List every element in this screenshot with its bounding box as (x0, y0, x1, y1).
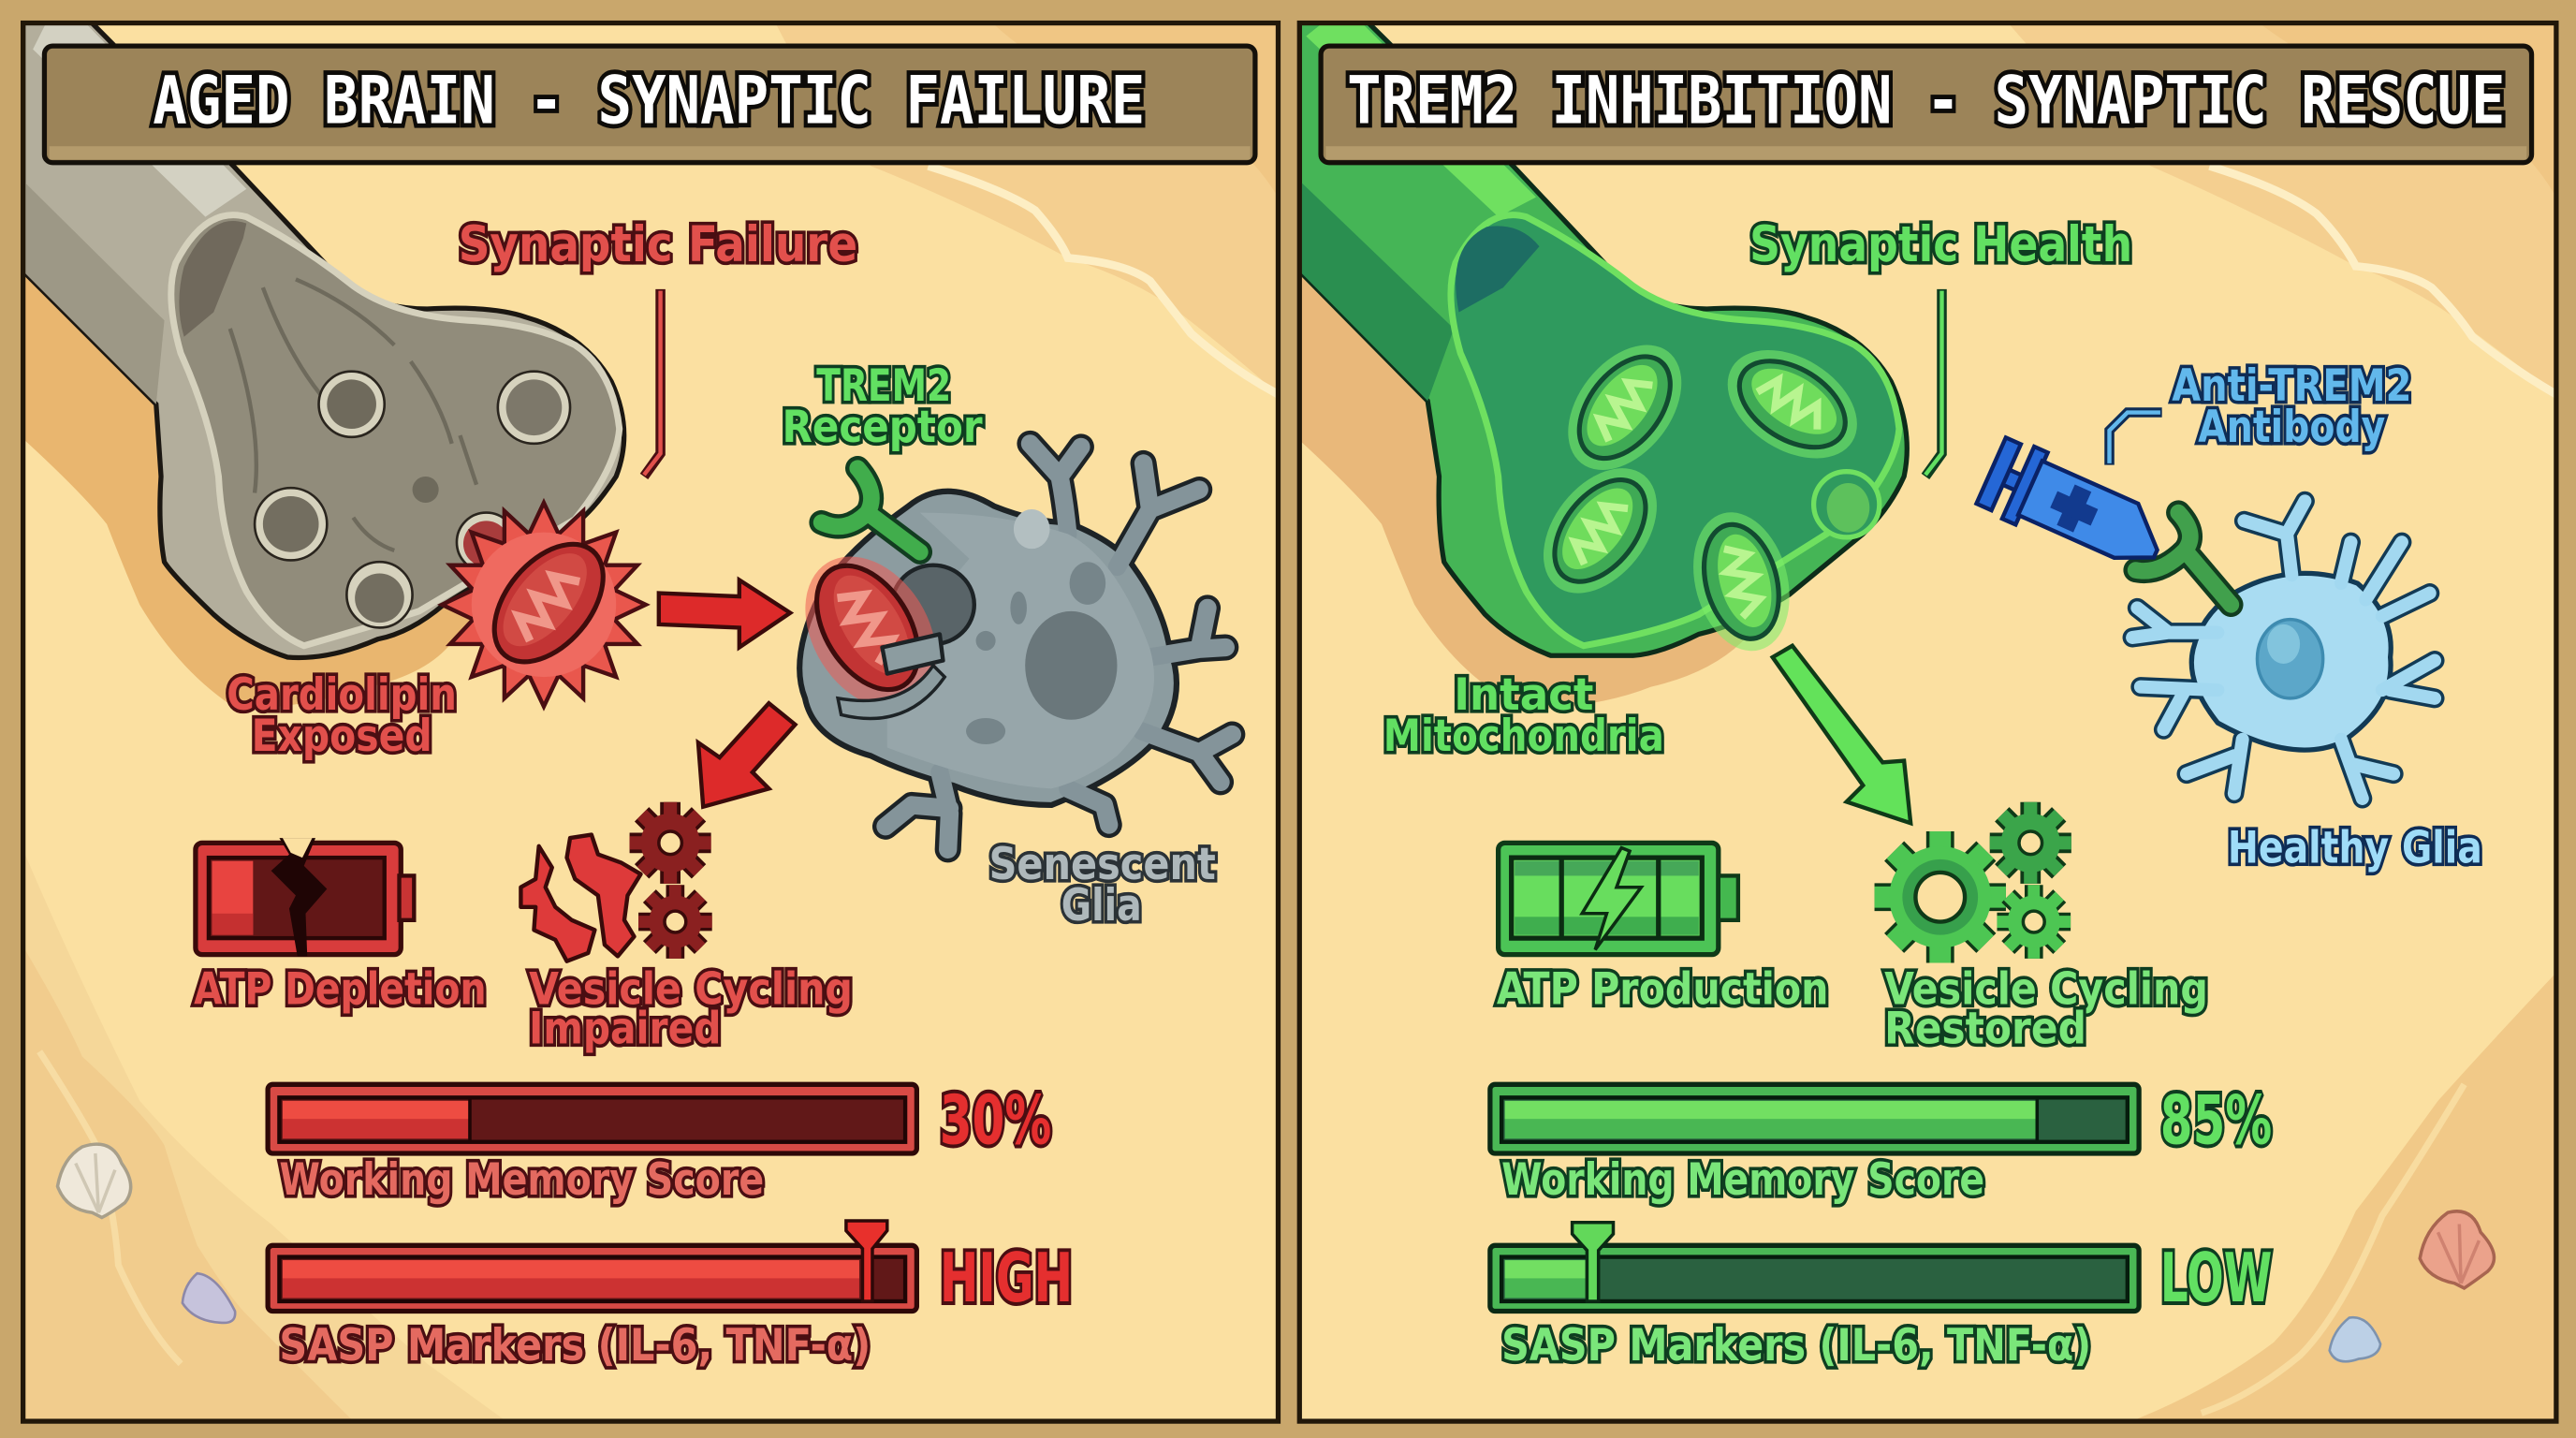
icon: broken battery (196, 838, 414, 956)
label: senescent glia: Senescent (989, 839, 1216, 890)
leader line: synaptic failure (644, 289, 661, 477)
senescent glia cell (779, 444, 1232, 849)
icon: charged battery (1499, 843, 1738, 955)
panel: aged brain synaptic failure (23, 17, 1278, 1430)
label: cardiolipin exposed: Exposed (252, 711, 432, 762)
leader line: antibody (2110, 413, 2162, 465)
label: vesicle cycling restored: Vesicle Cycling (1884, 963, 2208, 1015)
label: vesicle cycling impaired: Vesicle Cycling (529, 963, 853, 1015)
label: SASP markers: SASP Markers (IL-6, TNF-α) (1501, 1320, 2091, 1372)
title banner: TREM2 inhibition (1321, 46, 2532, 163)
label: SASP markers: SASP Markers (IL-6, TNF-α) (279, 1320, 871, 1372)
label: TREM2 receptor: TREM2 (816, 360, 951, 412)
phagocytic pocket (892, 565, 974, 644)
bolt (1582, 848, 1641, 949)
value: 85%: 85% (2160, 1080, 2272, 1159)
value: high: HIGH (940, 1239, 1073, 1317)
shell: pink (2420, 1211, 2494, 1288)
mitochondrion 3 (1520, 447, 1680, 615)
value: 30%: 30% (940, 1080, 1051, 1159)
label: synaptic failure: Synaptic Failure (459, 216, 857, 273)
arrow: to restored (1773, 646, 1910, 823)
engulfed mitochondrion (805, 556, 936, 699)
sand: top right dune (772, 17, 1278, 394)
arrow: to glia (659, 580, 790, 647)
label: vesicle cycling impaired (529, 963, 853, 1054)
vesicle: red (455, 511, 503, 564)
label: working memory score: Working Memory Score (279, 1154, 764, 1206)
vesicle: ring 3 (255, 488, 327, 560)
panel: TREM2 inhibition synaptic rescue (1298, 17, 2556, 1430)
label: vesicle cycling restored: Restored (1884, 1003, 2086, 1054)
label: vesicle cycling restored (1884, 963, 2208, 1054)
label: anti-TREM2 antibody: Antibody (2198, 402, 2385, 453)
label: cardiolipin exposed (227, 669, 457, 762)
bar: SASP low (1490, 1223, 2139, 1312)
crack (271, 838, 327, 956)
label: healthy glia: Healthy Glia (2228, 822, 2482, 873)
neuron terminal: aged (23, 17, 624, 657)
mitochondrion 1 (1545, 324, 1705, 492)
sand: lower left dune (23, 849, 518, 1430)
arrow: to deficits (698, 703, 795, 807)
sand: shadow under neuron (23, 271, 624, 710)
panel border left (23, 23, 1278, 1421)
bar: SASP high (268, 1221, 916, 1312)
label: TREM2 receptor (782, 360, 983, 453)
pseudopod (883, 634, 943, 674)
icon: broken gears (520, 802, 712, 961)
label: anti-TREM2 antibody (2172, 360, 2411, 453)
label: vesicle cycling impaired: Impaired (529, 1003, 722, 1054)
marker (846, 1221, 887, 1301)
vesicle: ring 1 (319, 372, 385, 437)
shell: white (57, 1144, 131, 1217)
icon: healthy gears (1875, 802, 2071, 962)
sand: shadow under neuron (1298, 271, 1906, 710)
label: ATP depletion: ATP Depletion (194, 963, 487, 1015)
label: intact mitochondria: Intact (1454, 669, 1593, 721)
leader line: synaptic health (1925, 289, 1942, 477)
label: intact mitochondria: Mitochondria (1383, 711, 1664, 762)
healthy glia cell (2132, 501, 2435, 799)
marker (1573, 1223, 1613, 1301)
label: working memory score: Working Memory Score (1501, 1154, 1984, 1206)
panel border right (1299, 23, 2556, 1421)
glia nucleus (1025, 611, 1117, 720)
shell: lilac (183, 1273, 235, 1323)
bar: working memory 85% (1490, 1084, 2139, 1153)
bar: working memory 30% (268, 1084, 916, 1153)
vesicle: ring 2 (498, 372, 570, 444)
TREM2 receptor: right (2136, 513, 2231, 605)
label: intact mitochondria (1383, 669, 1664, 762)
label: ATP production: ATP Production (1497, 963, 1828, 1015)
label: synaptic health: Synaptic Health (1749, 216, 2132, 273)
icon: syringe (1975, 434, 2175, 581)
broken gear (520, 835, 641, 961)
value: low: LOW (2160, 1239, 2272, 1317)
sand: top right dune (2002, 17, 2556, 394)
vesicle: docking (1814, 472, 1880, 537)
neuron terminal: healthy (1299, 17, 1907, 655)
vesicle: ring 4 (346, 562, 413, 627)
shell: blue (2330, 1317, 2380, 1361)
label: senescent glia: Glia (1061, 880, 1142, 932)
glia nucleus (2257, 620, 2323, 698)
title banner: aged brain (44, 46, 1255, 163)
TREM2 receptor: left (822, 468, 920, 552)
title banner: aged brain: AGED BRAIN - SYNAPTIC FAILURE (153, 63, 1145, 139)
mitochondrion 4 exiting (1678, 502, 1804, 662)
label: senescent glia (989, 839, 1216, 932)
mitochondrion 2 (1708, 328, 1877, 480)
label: anti-TREM2 antibody: Anti-TREM2 (2172, 360, 2411, 412)
label: TREM2 receptor: Receptor (782, 402, 983, 453)
label: cardiolipin exposed: Cardiolipin (227, 669, 457, 721)
mitochondrion: exposed cardiolipin burst (442, 503, 646, 707)
sand: lower right dune (2110, 973, 2556, 1430)
